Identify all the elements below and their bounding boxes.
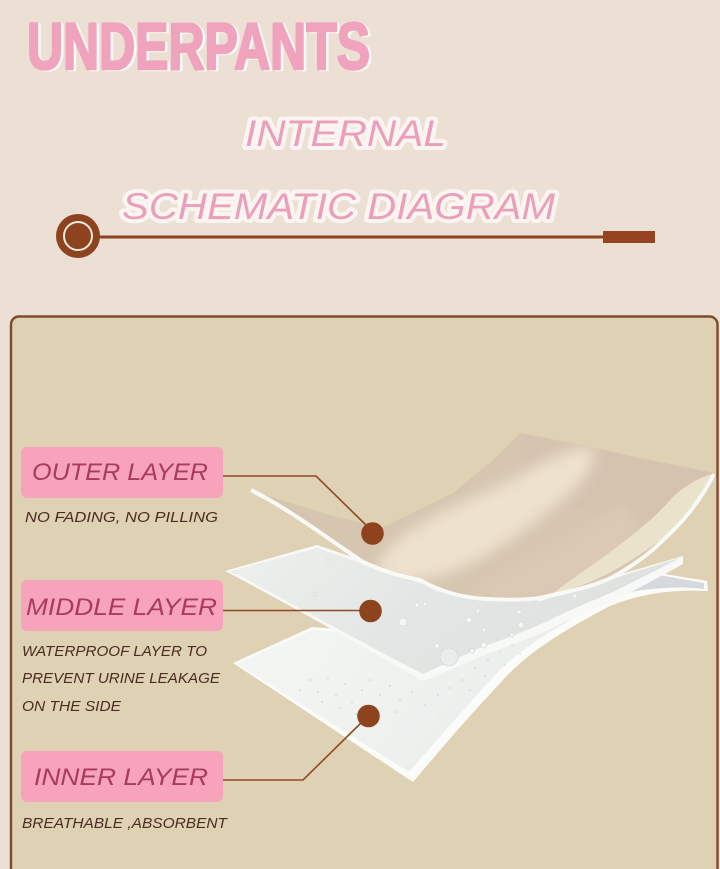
layer: middle — [225, 545, 683, 681]
text: middle layer description — [22, 644, 220, 715]
title rule with target marker — [56, 214, 655, 258]
title: underpants: UNDERPANTS — [27, 9, 370, 83]
label: inner layer — [21, 751, 223, 802]
text: middle layer description: WATERPROOF LAYER TO — [22, 644, 207, 660]
marker dot: outer layer — [361, 522, 384, 545]
white front edge — [251, 474, 714, 600]
layer: inner — [233, 572, 708, 782]
label: middle layer: MIDDLE LAYER — [26, 594, 217, 621]
label: outer layer: OUTER LAYER — [32, 459, 208, 486]
water droplets — [234, 558, 577, 666]
heading: internal: INTERNAL — [245, 113, 446, 154]
connector: outer layer — [223, 476, 368, 527]
connector: inner layer — [223, 720, 364, 780]
fabric shading — [376, 445, 712, 593]
layer: outer — [250, 433, 715, 605]
panel: layer diagram — [11, 316, 718, 869]
label: inner layer: INNER LAYER — [34, 764, 208, 791]
connector: middle layer — [223, 610, 365, 612]
marker dot: middle layer — [359, 600, 382, 622]
text: middle layer description: PREVENT URINE LEAKAGE — [22, 671, 220, 687]
label: middle layer — [21, 580, 223, 631]
text: middle layer description: ON THE SIDE — [22, 699, 121, 715]
speckled perforations — [299, 629, 541, 715]
heading: schematic diagram: SCHEMATIC DIAGRAM — [122, 186, 555, 227]
text: inner layer description: BREATHABLE ,ABSORBENT — [22, 816, 228, 832]
marker dot: inner layer — [357, 705, 380, 727]
label: outer layer — [21, 447, 223, 498]
text: outer layer description: NO FADING, NO PILLING — [25, 510, 218, 526]
